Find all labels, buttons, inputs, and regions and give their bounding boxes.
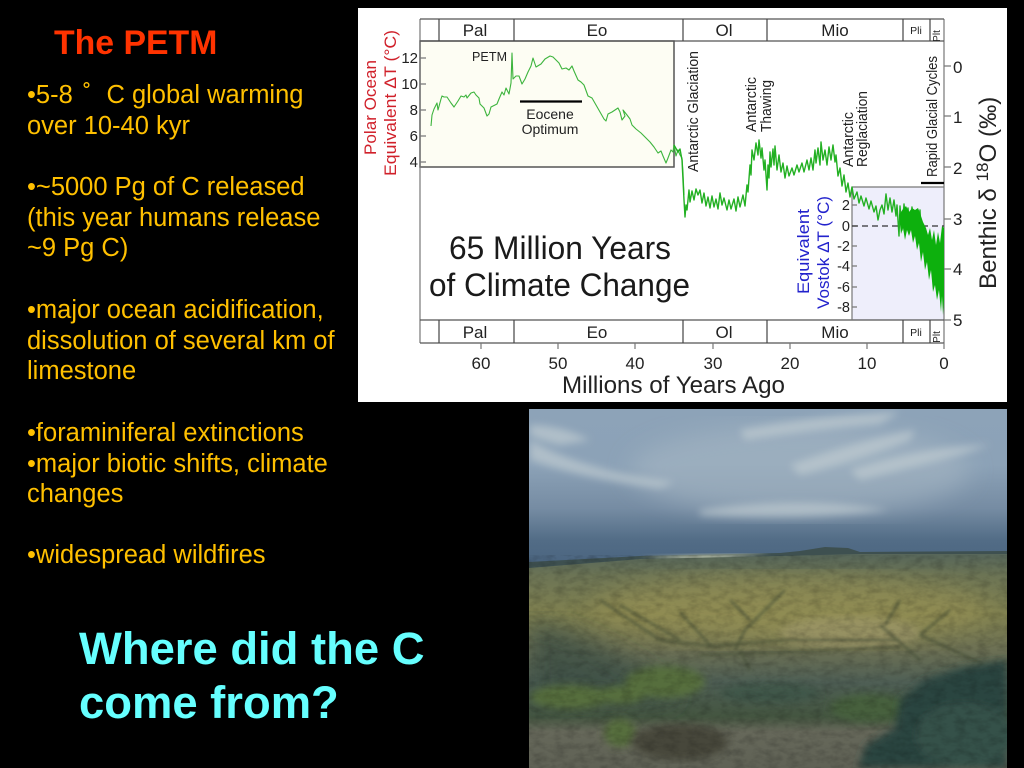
axis title: vostok temperature: [794, 196, 833, 309]
right axis numbers: benthic: [953, 58, 962, 330]
event annotations: Antarctic Glaciation: [685, 51, 702, 172]
era labels: bottom band: Mio: [821, 323, 849, 342]
sky haze: [630, 425, 970, 515]
text block: carbon released: (this year humans release: [27, 204, 320, 232]
question heading: Where did the C: [79, 623, 424, 674]
clouds: [530, 412, 990, 517]
label: PETM: PETM: [472, 50, 507, 64]
axis title: polar ocean temperature: [361, 30, 400, 176]
vostok axis numbers: 0: [842, 219, 850, 235]
vostok axis numbers: -4: [837, 259, 850, 275]
right axis numbers: benthic: 0: [953, 58, 962, 77]
data line: recent high-variability band: [899, 206, 944, 315]
era labels: bottom band: Plt: [932, 331, 943, 343]
chart heading: of Climate Change: [429, 267, 690, 303]
text block: ocean acidification: limestone: [27, 357, 136, 385]
right axis title: benthic delta 18 O: 18: [973, 162, 992, 181]
text block: warming: •5-8 ˚ C global warming: [27, 81, 303, 109]
question heading: come from?: [79, 677, 339, 728]
chart heading: 65 Million Years: [449, 230, 671, 266]
text block: wildfires: •widespread wildfires: [27, 541, 266, 569]
photo grain: [529, 555, 1007, 768]
event annotations: Reglaciation: [854, 91, 871, 167]
event annotations: Rapid Glacial Cycles: [924, 56, 941, 177]
foreground sagebrush: [858, 660, 1015, 768]
dark lower slope left: [529, 620, 680, 710]
yellow strata: [590, 576, 990, 644]
distant hills: [529, 547, 1007, 590]
bottom axis numbers: 30: [704, 354, 722, 373]
label: eocene optimum: Eocene: [526, 106, 574, 122]
era labels: bottom band: Eo: [587, 323, 607, 342]
label: eocene optimum: [520, 102, 582, 137]
era labels: top band: Pal: [463, 21, 487, 40]
text block: carbon released: [27, 173, 320, 262]
era labels: top band: [463, 21, 943, 42]
era labels: top band: Ol: [716, 21, 732, 40]
left axis numbers: polar ocean: 12: [401, 50, 418, 67]
photo: badlands landscape: [529, 409, 1007, 768]
text block: warming: [27, 81, 303, 140]
vostok axis numbers: -8: [837, 300, 850, 316]
question heading: [79, 623, 424, 728]
right axis numbers: benthic: 2: [953, 159, 962, 178]
gullies: [600, 590, 985, 670]
bottom axis numbers: 0: [939, 354, 949, 373]
axis title: vostok temperature: Vostok ΔT (°C): [814, 196, 833, 309]
era labels: top band: Eo: [587, 21, 607, 40]
vostok axis numbers: -6: [837, 280, 850, 296]
text block: extinctions and biotic shifts: •foraminiferal extinctions: [27, 419, 304, 447]
data line: benthic oxygen isotope curve: [431, 53, 922, 250]
left axis numbers: polar ocean: 8: [410, 102, 418, 119]
chart: 65 million years of climate change: [358, 8, 1007, 402]
text block: carbon released: ~9 Pg C): [27, 234, 128, 262]
text block: extinctions and biotic shifts: changes: [27, 480, 123, 508]
era labels: top band: Plt: [932, 30, 943, 42]
event annotations: Thawing: [758, 80, 775, 132]
axis title: polar ocean temperature: Equivalent ΔT (°C): [381, 30, 400, 176]
bottom axis numbers: 20: [781, 354, 799, 373]
title: The PETM: [54, 24, 217, 62]
era labels: bottom band: Pal: [463, 323, 487, 342]
event annotations: [685, 51, 941, 177]
text block: extinctions and biotic shifts: [27, 419, 328, 508]
right axis numbers: benthic: 1: [953, 108, 962, 127]
era labels: bottom band: [463, 323, 943, 343]
text block: ocean acidification: •major ocean acidification,: [27, 296, 324, 324]
axis title: polar ocean temperature: Polar Ocean: [361, 60, 380, 155]
vostok axis numbers: 2: [842, 198, 850, 214]
bottom axis title: Millions of Years Ago: [562, 372, 785, 399]
text block: warming: over 10-40 kyr: [27, 112, 190, 140]
text block: carbon released: •~5000 Pg of C released: [27, 173, 305, 201]
axis title: vostok temperature: Equivalent: [794, 209, 813, 294]
shrubs: [530, 666, 910, 747]
bottom axis numbers: 10: [858, 354, 876, 373]
text block: ocean acidification: [27, 296, 335, 385]
era labels: bottom band: Pli: [910, 327, 922, 339]
left axis numbers: polar ocean: [401, 50, 418, 171]
event annotations: Antarctic: [743, 77, 760, 132]
era labels: top band: Mio: [821, 21, 849, 40]
event annotations: Antarctic: [840, 112, 857, 167]
right axis numbers: benthic: 4: [953, 260, 962, 279]
dirt mound shadow: [632, 724, 728, 760]
right axis numbers: benthic: 5: [953, 311, 962, 330]
right axis numbers: benthic: 3: [953, 210, 962, 229]
bottom axis numbers: [472, 354, 949, 373]
panel: vostok inset: [852, 187, 944, 320]
left axis numbers: polar ocean: 10: [401, 76, 418, 93]
sky: [529, 409, 1007, 569]
right axis title: benthic delta 18 O: O (‰): [975, 97, 1002, 162]
land: [529, 554, 1007, 768]
bottom axis numbers: 40: [626, 354, 644, 373]
label: eocene optimum: Optimum: [522, 121, 578, 137]
left axis numbers: polar ocean: 4: [410, 154, 418, 171]
text block: ocean acidification: dissolution of several km of: [27, 327, 335, 355]
left axis numbers: polar ocean: 6: [410, 128, 418, 145]
text block: extinctions and biotic shifts: •major biotic shifts, climate: [27, 450, 328, 478]
bottom axis numbers: 50: [549, 354, 567, 373]
bottom axis numbers: 60: [472, 354, 490, 373]
chart heading: [429, 230, 690, 303]
era labels: top band: Pli: [910, 25, 922, 37]
era labels: bottom band: Ol: [716, 323, 732, 342]
panel: polar ocean inset: [420, 41, 674, 167]
vostok axis numbers: [837, 198, 850, 316]
right axis title: benthic delta 18 O: Benthic δ: [975, 188, 1002, 289]
vostok axis numbers: -2: [837, 239, 850, 255]
